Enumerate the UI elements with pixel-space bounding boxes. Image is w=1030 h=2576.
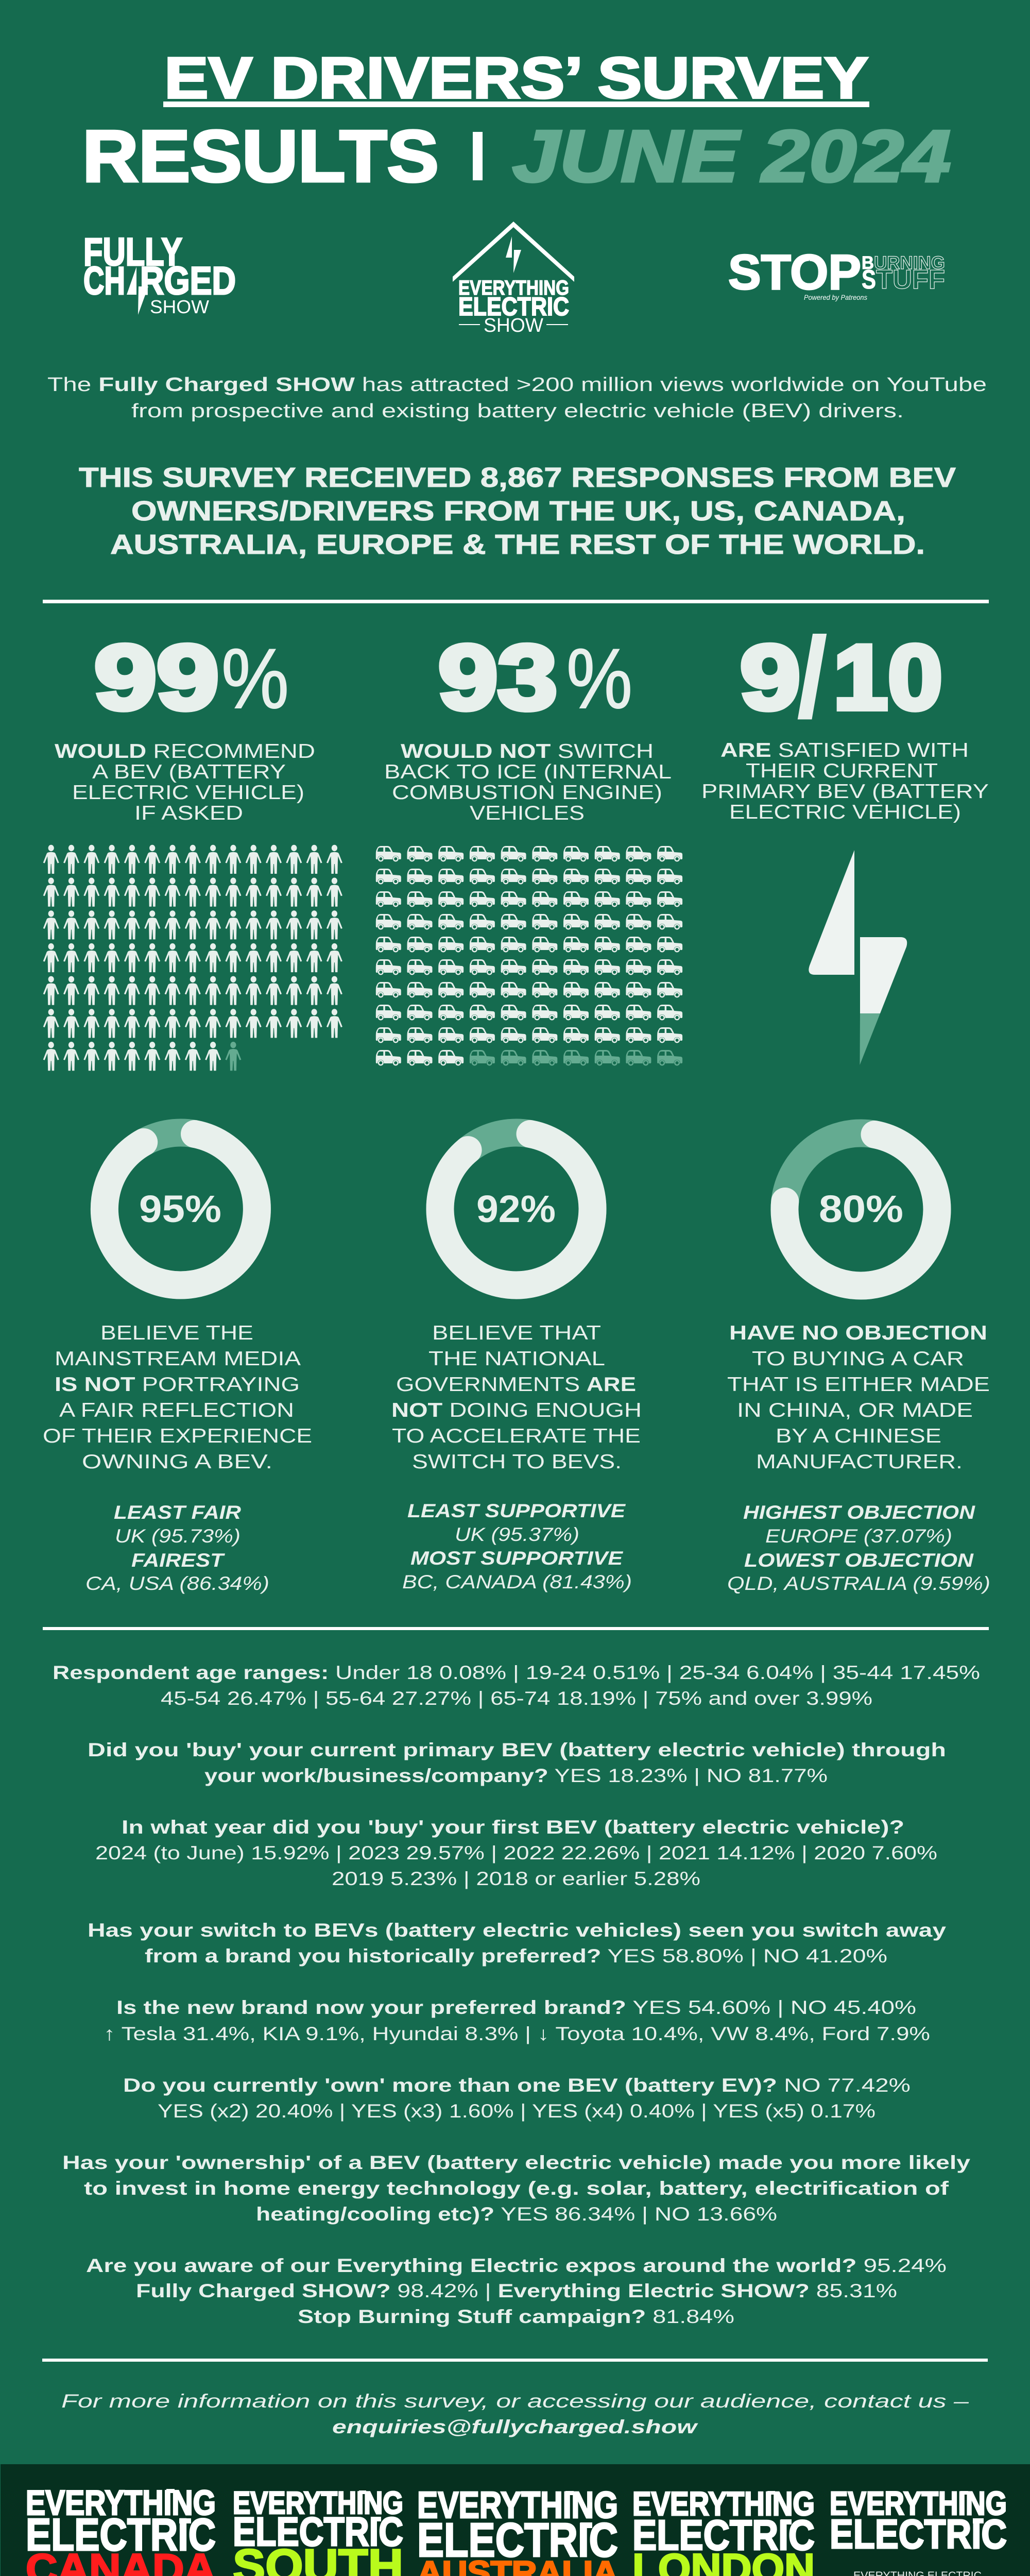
- logo: Stop Burning Stuff: Powered by Patreons: [804, 293, 867, 301]
- logo: Fully Charged Show: RGED: [140, 259, 236, 303]
- detail: highest and lowest objection: LOWEST OBJECTION: [744, 1550, 974, 1571]
- caption: no objection: THAT IS EITHER MADE: [727, 1374, 990, 1396]
- text block: age ranges: Respondent age ranges: Under 18 0.08% | 19-24 0.51% | 25-34 6.04% | 35-44 17.45%: [53, 1662, 980, 1683]
- text block: age ranges: [53, 1662, 980, 1709]
- caption: governments: TO ACCELERATE THE: [392, 1425, 641, 1447]
- donut chart: 92%: 92%: [476, 1188, 556, 1230]
- donut chart: 95%: [105, 1132, 257, 1285]
- contact text: [61, 2391, 969, 2437]
- caption: would recommend: ELECTRIC VEHICLE): [72, 782, 304, 804]
- heading: EV Drivers' Survey: EV DRIVERS’ SURVEY: [164, 45, 868, 110]
- caption: media: OWNING A BEV.: [82, 1451, 272, 1473]
- text block: brand switch: from a brand you historically preferred? YES 58.80% | NO 41.20%: [145, 1945, 887, 1967]
- caption: would not switch: VEHICLES: [470, 802, 585, 824]
- panel: 99 percent would recommend: [43, 626, 342, 1071]
- text block: home energy: [62, 2152, 971, 2225]
- stat: 93%: [438, 626, 632, 728]
- caption: would recommend: WOULD RECOMMEND: [55, 740, 315, 762]
- detail: least fair and fairest: CA, USA (86.34%): [85, 1573, 269, 1594]
- intro paragraph: [47, 374, 987, 422]
- logo: Stop Burning Stuff: S: [862, 265, 876, 295]
- detail: least fair and fairest: [85, 1502, 269, 1594]
- caption: no objection: HAVE NO OBJECTION: [729, 1322, 987, 1344]
- detail: least fair and fairest: LEAST FAIR: [114, 1502, 241, 1523]
- expo logo: South: [233, 2485, 403, 2576]
- caption: governments: NOT DOING ENOUGH: [391, 1399, 642, 1421]
- text block: awareness: [86, 2255, 947, 2327]
- expo logo: generic Everything Electric: [830, 2485, 1007, 2557]
- donut chart: 95%: 95%: [139, 1188, 221, 1230]
- logo: Fully Charged Show: SHOW: [150, 296, 209, 317]
- caption: are satisfied: ELECTRIC VEHICLE): [729, 801, 961, 823]
- donut chart: 92%: [440, 1132, 592, 1285]
- caption: media: OF THEIR EXPERIENCE: [43, 1425, 312, 1447]
- logo: Everything Electric Show: SHOW: [484, 315, 543, 336]
- text block: home energy: to invest in home energy technology (e.g. solar, battery, electrification of: [84, 2178, 949, 2199]
- text block: preferred brand: Is the new brand now your preferred brand? YES 54.60% | NO 45.40%: [116, 1997, 916, 2018]
- stat: 93%: 93: [438, 626, 557, 728]
- text block: preferred brand: ↑ Tesla 31.4%, KIA 9.1%, Hyundai 8.3% | ↓ Toyota 10.4%, VW 8.4%, Ford 7.9%: [104, 2023, 930, 2044]
- caption: media: IS NOT PORTRAYING: [55, 1374, 300, 1396]
- expo logo: Canada: [26, 2483, 216, 2576]
- caption: governments: THE NATIONAL: [428, 1348, 605, 1370]
- survey responses heading: THIS SURVEY RECEIVED 8,867 RESPONSES FROM BEV: [79, 462, 956, 493]
- logo: Everything Electric Show: [453, 222, 574, 336]
- logo: Everything Electric Show: EVERYTHING: [458, 277, 569, 299]
- stat: 99%: 99: [94, 626, 219, 728]
- text block: brand switch: [88, 1920, 947, 1967]
- donut chart: 80%: 80%: [819, 1188, 903, 1230]
- caption: would recommend: IF ASKED: [134, 802, 243, 824]
- intro paragraph: The Fully Charged SHOW has attracted >200 million views worldwide on YouTube: [47, 374, 987, 396]
- heading separator bar: [473, 132, 483, 180]
- donut chart: 80%: [784, 1133, 937, 1286]
- survey responses heading: OWNERS/DRIVERS FROM THE UK, US, CANADA,: [131, 496, 905, 527]
- detail: least and most supportive: MOST SUPPORTIVE: [410, 1548, 624, 1569]
- caption: are satisfied: ARE SATISFIED WITH: [720, 739, 969, 761]
- expo logo: Australia: [417, 2485, 618, 2576]
- caption: no objection: TO BUYING A CAR: [752, 1348, 964, 1370]
- expo logo: South: EVERYTHING: [233, 2485, 403, 2520]
- expo logo: Canada: EVERYTHING: [26, 2483, 216, 2522]
- stat: 99%: [94, 626, 289, 728]
- text block: awareness: Are you aware of our Everything Electric expos around the world? 95.24%: [86, 2255, 947, 2276]
- expo logo: Canada: ELECTRIC: [26, 2509, 216, 2560]
- text block: bought through work: your work/business/company? YES 18.23% | NO 81.77%: [204, 1765, 828, 1786]
- expo logo: Australia: ELECTRIC: [417, 2513, 618, 2567]
- caption: would recommend: [55, 740, 315, 824]
- caption: are satisfied: PRIMARY BEV (BATTERY: [701, 781, 989, 803]
- expo logo: London: ELECTRIC: [632, 2511, 815, 2559]
- detail: least and most supportive: [402, 1500, 632, 1592]
- contact text: enquiries@fullycharged.show: [332, 2416, 698, 2437]
- detail: highest and lowest objection: EUROPE (37.07%): [765, 1526, 952, 1547]
- logo: Stop Burning Stuff: STOP: [728, 245, 861, 300]
- logo: Stop Burning Stuff: URNING: [874, 253, 945, 273]
- stat: 99%: %: [221, 631, 289, 726]
- heading: Results: RESULTS: [82, 115, 439, 197]
- text block: bought through work: Did you 'buy' your current primary BEV (battery electric vehicle) through: [88, 1739, 946, 1760]
- caption: media: MAINSTREAM MEDIA: [55, 1348, 301, 1370]
- caption: governments: SWITCH TO BEVS.: [412, 1451, 622, 1473]
- caption: no objection: IN CHINA, OR MADE: [737, 1399, 973, 1421]
- expo logo: London: [632, 2485, 815, 2576]
- stat: 9/10: 9: [740, 626, 800, 728]
- panel: 9 of 10 satisfied: [701, 615, 989, 1065]
- text block: awareness: Stop Burning Stuff campaign? 81.84%: [298, 2306, 734, 2327]
- contact text: For more information on this survey, or accessing our audience, contact us –: [61, 2391, 969, 2412]
- heading underline: [163, 101, 869, 107]
- stat: 9/10: 10: [833, 626, 942, 728]
- caption: no objection: MANUFACTURER.: [756, 1451, 963, 1473]
- caption: would not switch: [384, 740, 672, 824]
- text block: first BEV year: 2024 (to June) 15.92% | 2023 29.57% | 2022 22.26% | 2021 14.12% | 2020 7.60%: [95, 1842, 937, 1863]
- caption: governments: [391, 1322, 642, 1473]
- survey responses heading: AUSTRALIA, EUROPE & THE REST OF THE WORLD.: [110, 529, 925, 560]
- intro paragraph: from prospective and existing battery electric vehicle (BEV) drivers.: [131, 400, 904, 422]
- caption: governments: GOVERNMENTS ARE: [396, 1374, 636, 1396]
- panel: 93 percent would not switch back: [376, 626, 682, 1066]
- caption: would not switch: BACK TO ICE (INTERNAL: [384, 761, 672, 783]
- icon: lightning bolt 9 of 10 filled: [809, 850, 907, 1065]
- detail: least fair and fairest: FAIREST: [131, 1550, 226, 1571]
- text block: own more than one: Do you currently 'own' more than one BEV (battery EV)? NO 77.42%: [123, 2075, 911, 2096]
- pictogram: people 99 of 100: [43, 845, 342, 1071]
- panel: 95 percent media: [43, 1132, 312, 1594]
- panel: 80 percent no objection: [727, 1133, 990, 1594]
- caption: are satisfied: THEIR CURRENT: [746, 760, 938, 782]
- caption: media: A FAIR REFLECTION: [59, 1399, 294, 1421]
- pictogram: cars 93 of 100: [376, 846, 682, 1066]
- text block: brand switch: Has your switch to BEVs (battery electric vehicles) seen you switch away: [88, 1920, 947, 1941]
- caption: would not switch: WOULD NOT SWITCH: [401, 740, 654, 762]
- caption: governments: BELIEVE THAT: [432, 1322, 601, 1344]
- detail: least and most supportive: UK (95.37%): [455, 1524, 579, 1545]
- caption: would recommend: A BEV (BATTERY: [92, 761, 286, 783]
- logo: Everything Electric Show: ELECTRIC: [458, 292, 569, 321]
- text block: own more than one: YES (x2) 20.40% | YES (x3) 1.60% | YES (x4) 0.40% | YES (x5) 0.17%: [158, 2100, 876, 2122]
- logo: Stop Burning Stuff: B: [862, 253, 874, 273]
- detail: least fair and fairest: UK (95.73%): [115, 1526, 241, 1547]
- title: [82, 45, 951, 197]
- caption: media: BELIEVE THE: [100, 1322, 253, 1344]
- panel: 92 percent governments: [391, 1132, 642, 1592]
- caption: are satisfied: [701, 739, 989, 823]
- text block: first BEV year: 2019 5.23% | 2018 or earlier 5.28%: [332, 1868, 700, 1889]
- logo: Stop Burning Stuff: TUFF: [876, 265, 945, 295]
- text block: own more than one: [123, 2075, 911, 2122]
- expo logo: Australia: EVERYTHING: [417, 2485, 618, 2526]
- stat: 9/10: /: [798, 615, 827, 740]
- panel: survey question results: [53, 1662, 980, 2327]
- detail: least and most supportive: LEAST SUPPORTIVE: [407, 1500, 626, 1521]
- caption: no objection: [727, 1322, 990, 1473]
- logo: Fully Charged Show: CH: [83, 259, 125, 303]
- detail: highest and lowest objection: QLD, AUSTRALIA (9.59%): [727, 1573, 990, 1594]
- caption: no objection: BY A CHINESE: [776, 1425, 941, 1447]
- text block: age ranges: 45-54 26.47% | 55-64 27.27% | 65-74 18.19% | 75% and over 3.99%: [161, 1688, 872, 1709]
- heading: June 2024: JUNE 2024: [512, 115, 951, 197]
- text block: first BEV year: [95, 1817, 937, 1889]
- text block: preferred brand: [104, 1997, 930, 2044]
- expo logo: South: ELECTRIC: [233, 2509, 403, 2554]
- detail: highest and lowest objection: HIGHEST OBJECTION: [743, 1502, 975, 1523]
- caption: media: [43, 1322, 312, 1473]
- text block: first BEV year: In what year did you 'buy' your first BEV (battery electric vehicle)?: [122, 1817, 904, 1838]
- stat: 93%: %: [566, 631, 632, 726]
- text block: bought through work: [88, 1739, 946, 1786]
- stat: 9/10: [740, 615, 942, 740]
- caption: would not switch: COMBUSTION ENGINE): [392, 782, 662, 804]
- logo: Stop Burning Stuff: [728, 245, 945, 301]
- logo: Fully Charged Show: FULLY: [83, 230, 182, 274]
- text block: awareness: Fully Charged SHOW? 98.42% | Everything Electric SHOW? 85.31%: [136, 2280, 897, 2301]
- panel: expo footer: [1, 2464, 1030, 2576]
- detail: highest and lowest objection: [727, 1502, 990, 1594]
- survey responses heading: [79, 462, 956, 560]
- text block: home energy: heating/cooling etc)? YES 86.34% | NO 13.66%: [256, 2204, 777, 2225]
- text block: home energy: Has your 'ownership' of a BEV (battery electric vehicle) made you more likely: [62, 2152, 971, 2173]
- detail: least and most supportive: BC, CANADA (81.43%): [402, 1571, 632, 1592]
- expo logo: London: EVERYTHING: [632, 2485, 815, 2522]
- expo logo: generic Everything Electric: ELECTRIC: [830, 2511, 1007, 2557]
- logo: Fully Charged Show: [83, 230, 236, 317]
